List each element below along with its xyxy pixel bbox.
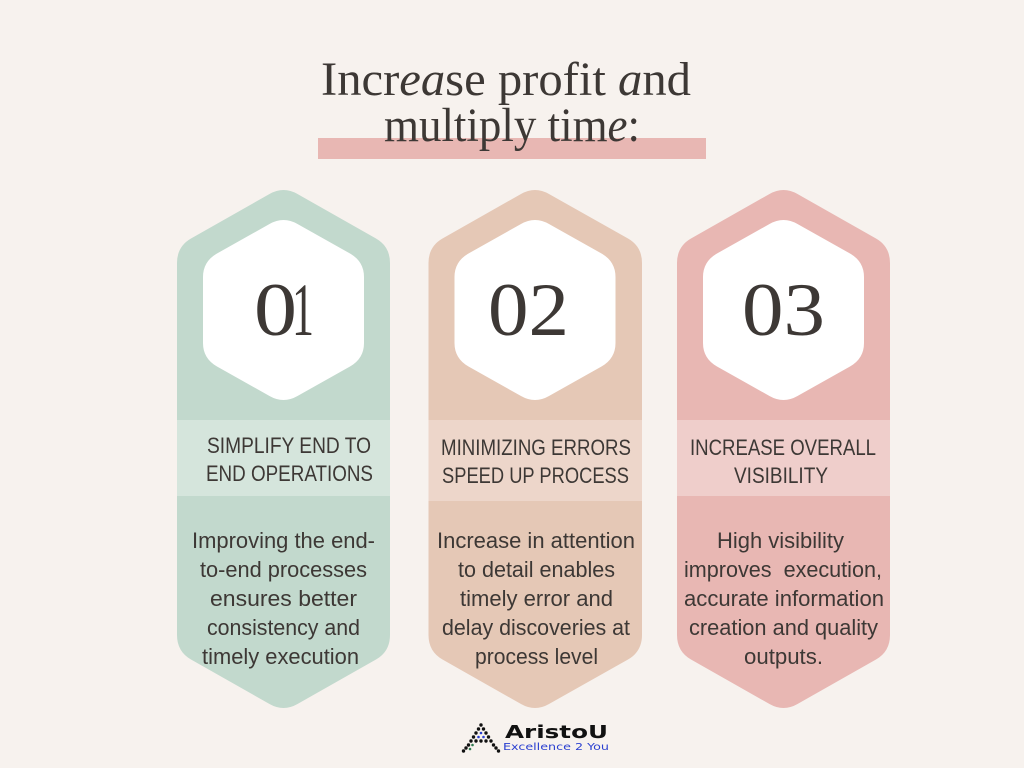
heading: VISIBILITY: [734, 463, 828, 488]
icon: white hexagon: [703, 220, 864, 400]
icon: white hexagon: [454, 220, 616, 400]
heading: SIMPLIFY END TO: [207, 433, 371, 458]
body text: Increase in attention: [437, 528, 635, 553]
number 01: 1: [292, 269, 314, 352]
body text: timely error and: [460, 586, 613, 611]
body text: to-end processes: [200, 557, 367, 582]
panel: 02 minimizing errors speed up process: [428, 190, 642, 708]
heading: END OPERATIONS: [206, 461, 373, 486]
body text: timely execution: [202, 644, 359, 669]
heading: SPEED UP PROCESS: [442, 463, 629, 488]
heading: MINIMIZING ERRORS: [441, 435, 631, 460]
title with highlight bar: multiply time:: [384, 99, 640, 152]
body text: outputs.: [744, 644, 823, 669]
body text: process level: [475, 644, 598, 669]
heading: [441, 435, 631, 488]
body text: delay discoveries at: [442, 615, 631, 640]
body text: accurate information: [684, 586, 884, 611]
body text: [437, 528, 635, 669]
icon: white hexagon: [203, 220, 364, 400]
logo: AristoU: [462, 722, 609, 753]
heading: INCREASE OVERALL: [690, 435, 876, 460]
heading: [690, 435, 876, 488]
panel: 01 simplify end to end operations: [177, 190, 390, 708]
logo: AristoU: AristoU: [505, 722, 608, 743]
number 01: [254, 269, 314, 352]
body text: ensures better: [210, 586, 358, 611]
logo: AristoU: Excellence 2 You: [503, 742, 609, 753]
body text: [684, 528, 884, 669]
body text: [192, 528, 375, 669]
number 01: 0: [254, 269, 297, 352]
body text: Improving the end-: [192, 528, 375, 553]
panel: 03 increase overall visibility: [677, 190, 890, 708]
title with highlight bar: Increase profit and: [321, 53, 691, 106]
body text: High visibility: [717, 528, 845, 553]
number 02: 02: [488, 269, 569, 352]
heading: [206, 433, 373, 486]
body text: creation and quality: [689, 615, 879, 640]
body text: consistency and: [207, 615, 360, 640]
body text: to detail enables: [458, 557, 615, 582]
title with highlight bar: [318, 53, 706, 159]
number 03: 03: [742, 269, 825, 352]
body text: improves execution,: [684, 557, 882, 582]
icon: dotted triangle: [462, 723, 500, 753]
